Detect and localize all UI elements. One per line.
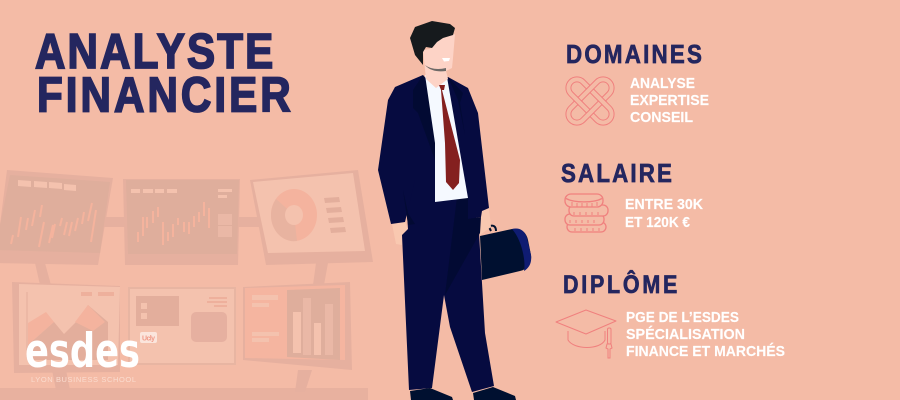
title (35, 24, 291, 122)
jacket (378, 75, 489, 224)
monitor: candlestick chart left (0, 170, 113, 265)
text block: PGE DE L’ESDES (626, 309, 739, 326)
shoes (410, 387, 516, 400)
trouser shadow (445, 197, 481, 295)
jaw shadow (425, 65, 446, 71)
text block: FINANCE ET MARCHÉS (626, 343, 785, 360)
text block (625, 196, 703, 231)
heading: DOMAINES (566, 40, 702, 69)
jacket fold shadow (403, 190, 415, 225)
section: diplome (556, 269, 785, 360)
logo: esdes: Ucly (142, 336, 155, 342)
hair (410, 21, 455, 65)
text block: ET 120K € (625, 214, 691, 231)
title: FINANCIER (37, 68, 291, 122)
text block: EXPERTISE (630, 92, 709, 109)
mouth detail (442, 58, 450, 62)
text block: ANALYSE (630, 75, 695, 92)
title: ANALYSTE (35, 24, 273, 79)
monitor: area chart (12, 282, 120, 373)
background illustration: trading desk monitors (0, 170, 373, 400)
icon: interlaced knot (565, 76, 615, 126)
logo: esdes: LYON BUSINESS SCHOOL (31, 375, 136, 384)
hands (392, 208, 491, 245)
monitor: candlestick chart centre (123, 179, 240, 265)
logo: esdes: esdes (25, 324, 140, 379)
text block: ENTRE 30K (625, 196, 703, 213)
briefcase (480, 226, 531, 280)
trousers (402, 180, 494, 392)
person: financial analyst with briefcase (378, 21, 531, 400)
monitor: donut chart (250, 170, 373, 265)
heading: SALAIRE (561, 159, 672, 188)
text block (630, 75, 709, 126)
text block: CONSEIL (630, 109, 693, 126)
monitor: bar chart (243, 282, 352, 370)
lapels (413, 75, 465, 160)
monitor: dashboard panels (129, 288, 235, 364)
icon: coins (565, 194, 608, 232)
shirt (425, 75, 468, 202)
neck and face (423, 34, 455, 88)
section: domaines (565, 40, 709, 126)
text block (626, 309, 785, 360)
heading: DIPLÔME (563, 269, 677, 298)
tie (439, 85, 460, 190)
text block: SPÉCIALISATION (626, 326, 745, 343)
icon: graduation cap (556, 310, 616, 358)
section: salaire (561, 159, 703, 232)
